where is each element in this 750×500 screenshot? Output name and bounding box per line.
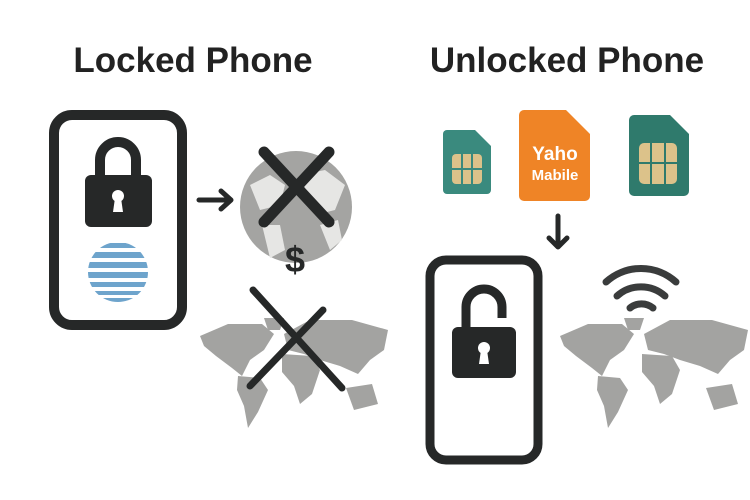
icon: orange sim card: Mabile <box>532 167 578 184</box>
title: unlocked phone: Unlocked Phone <box>430 41 704 80</box>
unlocked phone <box>430 260 538 460</box>
icon: closed padlock <box>85 142 152 227</box>
icon: world map <box>560 318 748 428</box>
icon: carrier globe logo <box>85 243 151 302</box>
icon: orange sim card <box>519 110 590 201</box>
icon: wifi signal <box>606 268 676 308</box>
arrow: down <box>549 216 567 247</box>
icon: sim card right <box>629 115 689 196</box>
icon: sim card left <box>443 130 491 194</box>
locked phone <box>54 115 182 325</box>
icon: world map with X <box>200 290 388 428</box>
icon: open padlock <box>452 289 516 378</box>
title: locked phone: Locked Phone <box>73 41 313 80</box>
arrow: right <box>199 191 231 209</box>
icon: globe with X and dollar: $ <box>285 239 305 280</box>
icon: orange sim card: Yaho <box>532 144 578 165</box>
icon: globe with X and dollar <box>240 151 352 280</box>
